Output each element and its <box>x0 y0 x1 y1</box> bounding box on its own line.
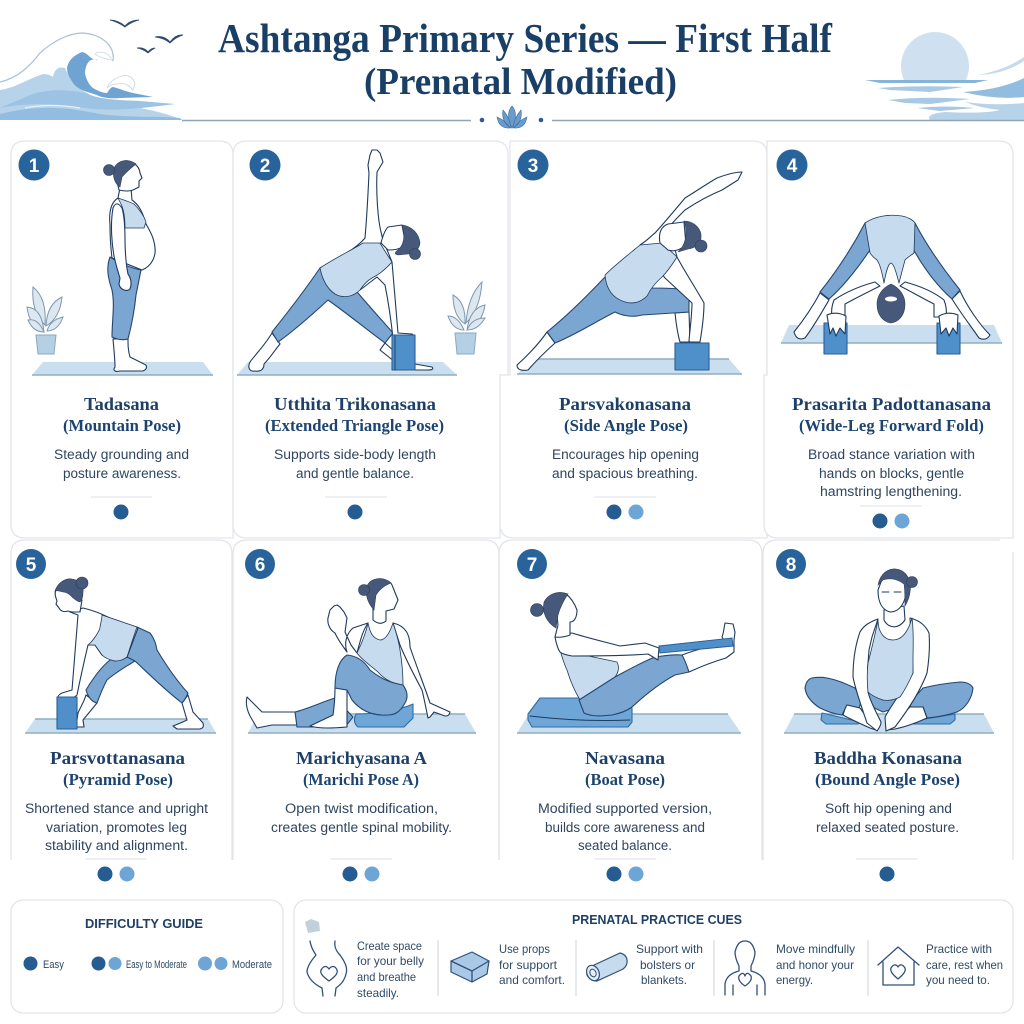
cue text 1 <box>357 939 424 1000</box>
badge 7 <box>517 549 547 579</box>
cue text 5: you need to. <box>926 973 990 987</box>
plant <box>448 282 485 354</box>
cue text 5 <box>926 942 1003 987</box>
legend: moderate <box>198 956 272 971</box>
badge 8: 8 <box>786 555 796 576</box>
cue text 4: Move mindfully <box>776 942 855 956</box>
legend: moderate: Moderate <box>232 959 272 971</box>
bolster <box>528 698 632 727</box>
badge 6 <box>245 549 275 579</box>
cue text 1: Create space <box>357 939 422 953</box>
card 6: Marichyasana A <box>233 540 499 882</box>
description: Modified supported version, <box>538 801 712 816</box>
figure: standing pregnant woman <box>104 161 155 371</box>
difficulty dots <box>342 866 380 882</box>
difficulty dots <box>872 514 910 528</box>
cue text 2 <box>499 942 565 987</box>
description: hands on blocks, gentle <box>819 466 964 481</box>
pose name <box>296 748 427 789</box>
hands <box>827 313 958 336</box>
plant <box>27 287 63 354</box>
card 1: Tadasana <box>11 141 233 538</box>
pose name: (Mountain Pose) <box>63 416 181 435</box>
description: and gentle balance. <box>296 466 414 481</box>
badge 2 <box>250 150 280 180</box>
title: (Prenatal Modified) <box>364 61 677 103</box>
icon: bolster <box>584 953 627 983</box>
figure: triangle pose <box>249 150 433 371</box>
yoga mat <box>25 719 216 733</box>
pose name: (Marichi Pose A) <box>303 770 419 789</box>
difficulty dots <box>348 504 362 520</box>
difficulty dots <box>606 504 644 520</box>
cue text 4: energy. <box>776 973 813 987</box>
description: Encourages hip opening <box>552 447 699 462</box>
pose name: (Pyramid Pose) <box>63 770 173 789</box>
pose name: Tadasana <box>84 394 159 414</box>
card 7: Navasana <box>499 540 762 882</box>
badge 6: 6 <box>255 555 265 576</box>
legend: easy to moderate <box>92 956 187 971</box>
legend: easy to moderate: Easy to Moderate <box>126 959 187 971</box>
bolster <box>354 704 413 727</box>
yoga block <box>57 697 77 729</box>
description: and spacious breathing. <box>552 466 698 481</box>
figure: wide-leg forward fold <box>794 215 990 339</box>
yoga mat <box>784 714 994 733</box>
heading: PRENATAL PRACTICE CUES <box>572 912 742 927</box>
pose name <box>559 394 691 435</box>
description: relaxed seated posture. <box>816 820 959 835</box>
badge 1 <box>18 150 50 180</box>
legend: easy: Easy <box>43 959 64 971</box>
card 4: Prasarita Padottanasana <box>764 141 1013 538</box>
pose name: Parsvakonasana <box>559 394 691 414</box>
pose name: (Extended Triangle Pose) <box>265 416 444 435</box>
description <box>274 447 436 481</box>
cue text 3: bolsters or <box>640 958 695 972</box>
description <box>552 447 699 481</box>
description: builds core awareness and <box>545 820 705 835</box>
cue text 5: Practice with <box>926 942 992 956</box>
icon: house with heart <box>878 947 919 985</box>
pose name: (Bound Angle Pose) <box>815 770 960 789</box>
yoga mat <box>781 325 1002 343</box>
difficulty dots <box>880 866 894 882</box>
badge 8 <box>776 549 806 579</box>
description: creates gentle spinal mobility. <box>271 820 452 835</box>
badge 3: 3 <box>528 156 538 177</box>
pose name: Baddha Konasana <box>814 748 962 768</box>
cue text 4 <box>776 942 855 987</box>
cue text 3: Support with <box>636 942 703 956</box>
pose name: Prasarita Padottanasana <box>792 394 991 414</box>
description: posture awareness. <box>63 466 181 481</box>
header decoration: sun and water <box>865 32 1024 120</box>
heading: DIFFICULTY GUIDE <box>85 916 203 931</box>
description <box>271 801 452 835</box>
pose name: (Boat Pose) <box>585 770 665 789</box>
panel: prenatal practice cues <box>294 900 1013 1013</box>
figure: boat pose with strap <box>530 592 735 716</box>
icon: yoga block <box>451 952 489 982</box>
description <box>54 447 189 481</box>
description <box>25 801 208 853</box>
badge 4 <box>776 150 808 180</box>
badge 4: 4 <box>787 156 798 177</box>
pose name <box>814 748 962 789</box>
pose name <box>792 394 991 435</box>
difficulty dots <box>606 866 644 882</box>
badge 1: 1 <box>29 156 40 177</box>
cue text 5: care, rest when <box>926 958 1003 972</box>
description <box>816 801 959 835</box>
small stray icon <box>305 919 320 933</box>
icon: pregnant belly <box>307 941 347 996</box>
cushions <box>821 713 955 724</box>
header decoration: ocean wave and birds <box>0 20 183 120</box>
yoga mat <box>32 362 213 375</box>
card 5: Parsvottanasana <box>11 540 232 882</box>
pose name: (Side Angle Pose) <box>564 416 688 435</box>
description: Soft hip opening and <box>825 801 952 816</box>
badge 7: 7 <box>527 555 537 576</box>
badge 2: 2 <box>260 156 270 177</box>
description <box>538 801 712 853</box>
yoga mat <box>517 714 741 733</box>
pose name: Navasana <box>585 748 665 768</box>
figure: side angle pose <box>517 172 742 370</box>
figure: seated twist <box>246 579 450 728</box>
figure: bound angle pose <box>805 569 973 731</box>
description: Steady grounding and <box>54 447 189 462</box>
card 3: Parsvakonasana <box>500 141 767 538</box>
description: Open twist modification, <box>285 801 438 816</box>
yoga mat <box>517 359 742 374</box>
legend: easy <box>24 956 64 971</box>
difficulty dots <box>98 866 134 882</box>
cue text 2: and comfort. <box>499 973 565 987</box>
description: stability and alignment. <box>45 838 188 853</box>
cue text 1: and breathe <box>357 970 416 984</box>
pose name: (Wide-Leg Forward Fold) <box>799 416 984 435</box>
pose name <box>50 748 185 789</box>
cue text 2: for support <box>499 958 558 972</box>
cue text 3 <box>636 942 703 987</box>
description: Broad stance variation with <box>808 447 975 462</box>
figure: pyramid pose <box>55 577 203 729</box>
description: Shortened stance and upright <box>25 801 208 816</box>
cue text 3: blankets. <box>641 973 687 987</box>
yoga blocks <box>824 323 960 354</box>
title <box>218 15 833 103</box>
pose name: Utthita Trikonasana <box>274 394 436 414</box>
pose name <box>265 394 444 435</box>
title: Ashtanga Primary Series — First Half <box>218 15 833 61</box>
pose name <box>63 394 181 435</box>
header divider with lotus <box>182 106 1024 128</box>
panel: difficulty guide <box>11 900 283 1013</box>
description: seated balance. <box>578 838 672 853</box>
badge 5 <box>16 549 46 579</box>
description <box>808 447 975 499</box>
yoga block <box>392 335 415 370</box>
description: variation, promotes leg <box>46 820 187 835</box>
card 8: Baddha Konasana <box>763 540 1013 882</box>
yoga mat <box>237 362 457 375</box>
difficulty dots <box>114 504 128 520</box>
pose name: Marichyasana A <box>296 748 427 768</box>
card 2: Utthita Trikonasana <box>233 141 508 538</box>
yoga block <box>675 343 709 370</box>
badge 3 <box>518 150 548 180</box>
pose name <box>585 748 665 789</box>
cue text 2: Use props <box>499 942 550 956</box>
badge 5: 5 <box>26 555 37 576</box>
description: Supports side-body length <box>274 447 436 462</box>
icon: person with heart <box>725 941 765 995</box>
cue text 1: steadily. <box>357 986 399 1000</box>
description: hamstring lengthening. <box>820 484 962 499</box>
cue text 4: and honor your <box>776 958 854 972</box>
pose name: Parsvottanasana <box>50 748 185 768</box>
cue text 1: for your belly <box>357 954 424 968</box>
yoga mat <box>248 714 476 733</box>
